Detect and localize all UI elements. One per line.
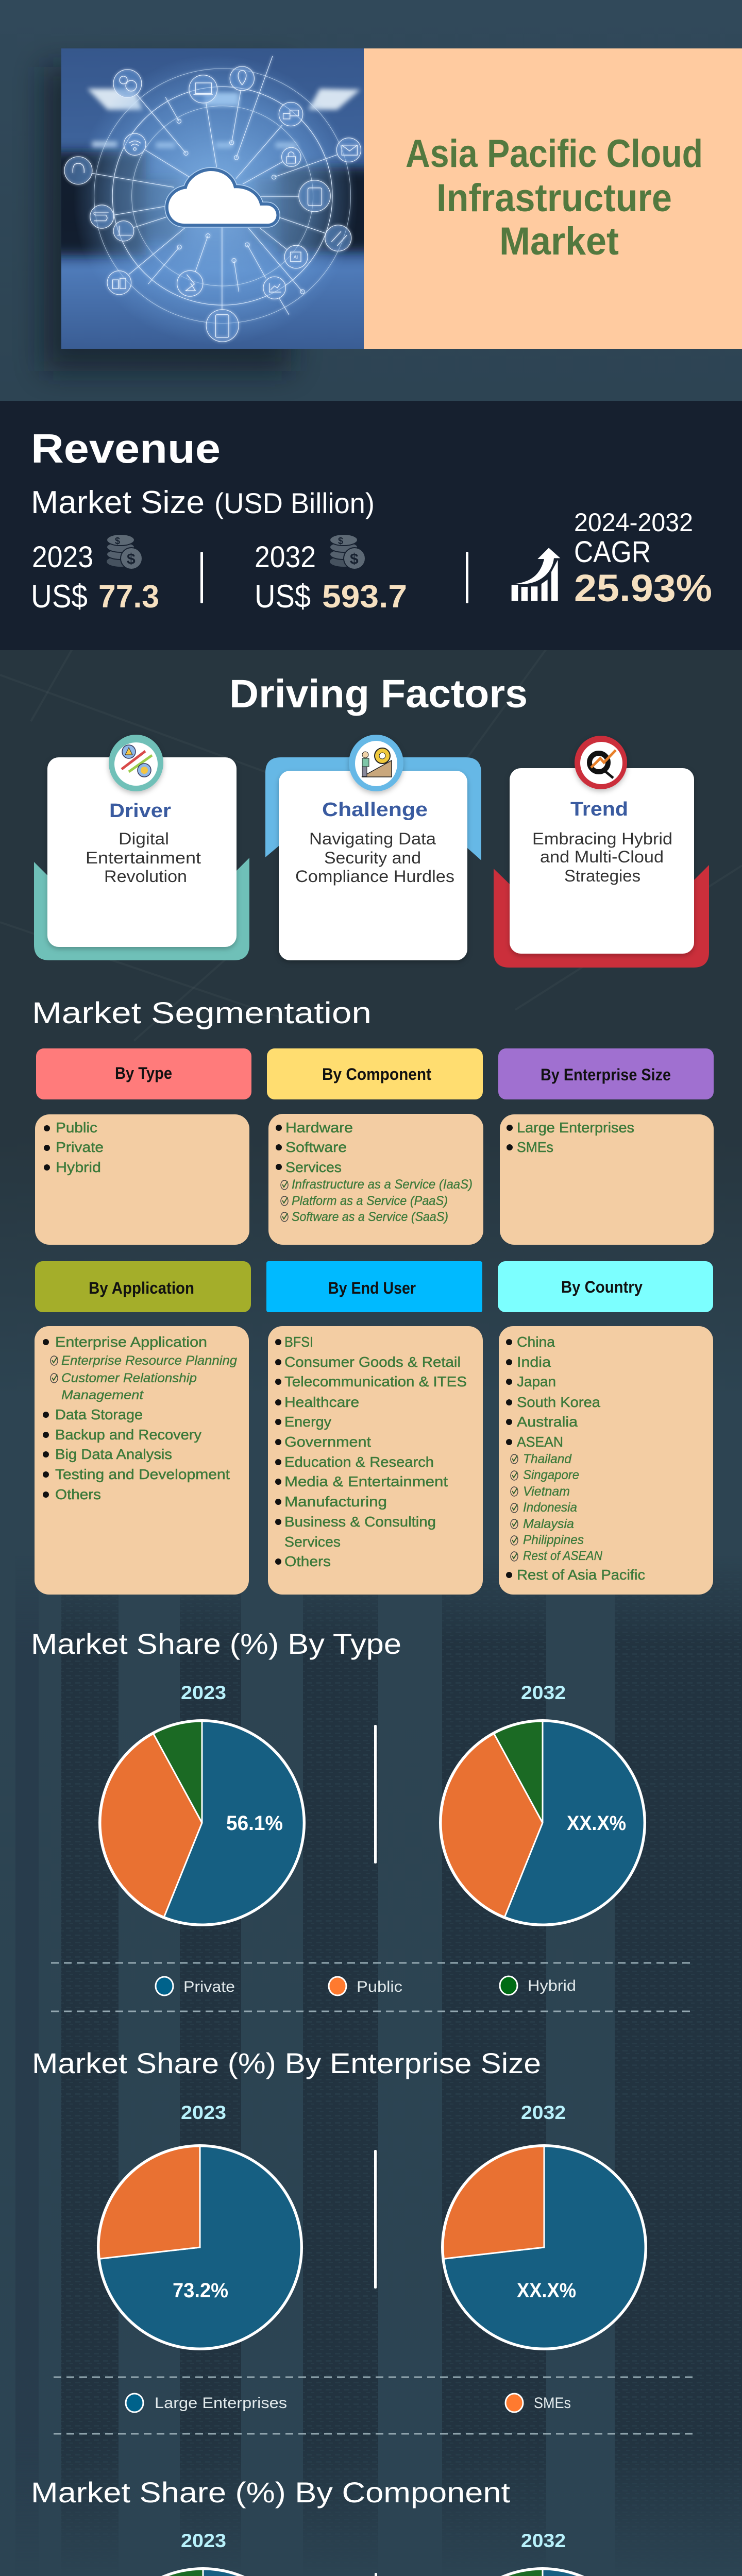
by application list: Customer Relationship: [61, 1371, 197, 1385]
by end user list: Education & Research: [284, 1454, 434, 1470]
by country list: Indonesia: [523, 1500, 577, 1515]
by end user list: Consumer Goods & Retail: [284, 1354, 461, 1370]
node icons: AI: [294, 255, 298, 260]
by type list: Public: [56, 1120, 97, 1136]
pie chart: component 2023: [99, 2567, 307, 2576]
by type list: Hybrid: [56, 1159, 101, 1175]
metric: 2032: 2032: [255, 540, 316, 574]
icon: growth chart: [512, 548, 560, 601]
section: share by enterprise size: 2032: [521, 2102, 566, 2123]
metric: 2032: 593.7: [322, 579, 407, 615]
section: share by component: 2032: [521, 2530, 566, 2551]
by country list: India: [517, 1354, 551, 1370]
segment: by application: By Application: [89, 1279, 194, 1297]
by country list: ASEAN: [517, 1434, 563, 1450]
driver text: [86, 829, 201, 886]
by end user list: Energy: [284, 1414, 331, 1430]
heading: market segmentation: Market Segmentation: [32, 996, 372, 1030]
by application list: Enterprise Resource Planning: [61, 1353, 237, 1368]
by component list: Infrastructure as a Service (IaaS): [292, 1177, 473, 1192]
by type list: Private: [56, 1139, 104, 1155]
icon: coins 2023: [107, 534, 142, 569]
legend: [156, 1976, 576, 1995]
icon: coins 2032: [330, 534, 365, 569]
challenge text: Compliance Hurdles: [295, 867, 454, 886]
pie chart: type 2023: [98, 1719, 306, 1926]
cloud: [168, 171, 276, 224]
metric: 2032: US$: [255, 579, 311, 615]
background: server rack strips: [61, 1594, 742, 2517]
legend: SMEs: [534, 2395, 571, 2412]
title: Asia Pacific Cloud: [406, 132, 703, 176]
legend: Private: [183, 1978, 235, 1995]
by country list: Philippines: [523, 1533, 584, 1547]
section: share by type: [31, 1628, 695, 2011]
by end user list: Services: [284, 1534, 341, 1550]
by country list: Vietnam: [523, 1484, 570, 1499]
connector lines: [92, 56, 337, 315]
section: share by component: 2023: [181, 2530, 226, 2551]
by country list: Australia: [517, 1414, 578, 1430]
by enterprise size list: SMEs: [517, 1139, 553, 1155]
challenge text: [295, 829, 454, 886]
pie chart: enterprise 2032: XX.X%: [517, 2279, 576, 2302]
pie chart: type 2032: [439, 1719, 646, 1926]
segment: by enterprise size: [498, 1048, 714, 1245]
by country list: Thailand: [523, 1452, 572, 1466]
by component list: [276, 1120, 473, 1224]
icon: coins 2023: $: [115, 536, 120, 546]
section: share by type: 2032: [521, 1682, 566, 1703]
heading: Market Share (%) By Type: [31, 1628, 401, 1660]
by end user list: [275, 1334, 467, 1569]
icon: trend badge: [575, 736, 627, 789]
by country list: Rest of ASEAN: [523, 1549, 603, 1563]
by end user list: Healthcare: [284, 1394, 359, 1410]
card: trend: Trend: [570, 799, 628, 820]
legend: Large Enterprises: [155, 2395, 287, 2412]
section: share by component: [31, 2476, 696, 2576]
heading: Market Share (%) By Component: [31, 2476, 510, 2509]
heading: driving factors: Driving Factors: [229, 672, 528, 716]
hero photo: cloud network: [50, 48, 376, 349]
metric: CAGR: 2024-2032: [574, 508, 693, 537]
challenge text: Navigating Data: [309, 829, 436, 848]
metric: 2023: US$: [31, 579, 88, 615]
by end user list: Manufacturing: [284, 1494, 387, 1510]
by end user list: Media & Entertainment: [284, 1473, 448, 1489]
by enterprise size list: Large Enterprises: [517, 1120, 634, 1136]
pie chart: enterprise 2023: [97, 2144, 303, 2350]
icon: coins 2032: $: [350, 551, 359, 568]
segment: by type: [35, 1048, 251, 1245]
by application list: [43, 1334, 237, 1502]
title: Market: [499, 219, 619, 263]
by type list: [44, 1120, 104, 1175]
metric: 2032: [255, 534, 407, 615]
card: trend: [494, 736, 709, 968]
card: challenge: Challenge: [322, 799, 428, 821]
by country list: Japan: [517, 1374, 556, 1389]
market size label: Market Size: [31, 485, 205, 520]
by enterprise size list: [507, 1120, 634, 1155]
revenue heading: Revenue: [31, 426, 221, 471]
by component list: Platform as a Service (PaaS): [292, 1194, 448, 1208]
by component list: Software: [285, 1139, 347, 1155]
by application list: Backup and Recovery: [55, 1427, 201, 1443]
by end user list: BFSI: [284, 1334, 313, 1350]
segment: by country: [498, 1261, 713, 1595]
revenue panel: [0, 401, 742, 650]
icon: driver badge: [109, 735, 163, 791]
card: driver: Driver: [109, 800, 171, 822]
section: share by type: 2023: [181, 1682, 226, 1703]
by component list: Services: [285, 1159, 342, 1175]
pie chart: type 2023: 56.1%: [226, 1812, 283, 1835]
by country list: Malaysia: [523, 1517, 574, 1531]
market size label: (USD Billion): [214, 487, 375, 519]
by application list: Others: [55, 1486, 101, 1502]
by country list: Rest of Asia Pacific: [517, 1567, 645, 1583]
driver text: Digital: [119, 829, 169, 848]
trend text: and Multi-Cloud: [540, 848, 664, 866]
by component list: Hardware: [285, 1120, 353, 1136]
by application list: Testing and Development: [55, 1466, 230, 1482]
card: challenge: [265, 735, 481, 960]
network rings: [94, 69, 351, 324]
by application list: Enterprise Application: [55, 1334, 207, 1350]
driver text: Revolution: [104, 867, 187, 886]
by end user list: Business & Consulting: [284, 1514, 436, 1530]
heading: Market Share (%) By Enterprise Size: [32, 2047, 541, 2079]
metric: CAGR: [574, 508, 712, 609]
trend text: Strategies: [564, 867, 640, 885]
by country list: China: [517, 1334, 555, 1350]
driver text: Entertainment: [86, 849, 201, 867]
by application list: Big Data Analysis: [55, 1446, 172, 1462]
pie chart: component 2032: [439, 2567, 646, 2576]
section: share by enterprise size: [32, 2047, 697, 2434]
icon: coins 2023: $: [127, 551, 136, 568]
by application list: Management: [61, 1388, 144, 1402]
segment: by application: [35, 1261, 251, 1595]
by country list: [506, 1334, 645, 1583]
network nodes: [64, 66, 361, 342]
icon: challenge badge: [349, 735, 403, 791]
by end user list: Telecommunication & ITES: [284, 1374, 467, 1389]
segment: by end user: By End User: [328, 1279, 416, 1297]
segment: by component: [267, 1048, 483, 1245]
by application list: Data Storage: [55, 1406, 143, 1422]
section: share by enterprise size: 2023: [181, 2102, 226, 2123]
by end user list: Others: [284, 1553, 331, 1569]
by country list: Singapore: [523, 1468, 579, 1482]
metric: 2023: [31, 534, 159, 615]
node icons: [73, 71, 357, 337]
legend: Hybrid: [528, 1977, 576, 1994]
pie chart: enterprise 2023: 73.2%: [173, 2279, 228, 2302]
metric: 2023: 77.3: [98, 579, 159, 615]
title: Infrastructure: [436, 176, 672, 220]
segment: by enterprise size: By Enterprise Size: [541, 1065, 671, 1084]
challenge text: Security and: [324, 849, 421, 867]
segment: by type: By Type: [115, 1064, 172, 1082]
legend: Public: [357, 1978, 402, 1995]
trend text: Embracing Hybrid: [532, 829, 672, 848]
by component list: Software as a Service (SaaS): [292, 1210, 448, 1224]
metric: 2023: 2023: [32, 540, 93, 574]
by end user list: Government: [284, 1434, 371, 1450]
icon: coins 2032: $: [338, 536, 343, 546]
segment: by end user: [266, 1261, 483, 1595]
segment: by country: By Country: [561, 1278, 643, 1296]
title panel: [364, 48, 742, 349]
legend: [126, 2394, 571, 2412]
metric: CAGR: CAGR: [574, 535, 651, 569]
metric: CAGR: 25.93%: [574, 567, 712, 609]
by country list: South Korea: [517, 1394, 600, 1410]
header band: [0, 0, 742, 401]
pie chart: enterprise 2032: [441, 2144, 647, 2350]
title: [406, 132, 703, 263]
segment: by component: By Component: [322, 1065, 431, 1083]
market size label: [31, 485, 375, 520]
pie chart: type 2032: XX.X%: [567, 1812, 626, 1835]
card: driver: [34, 735, 249, 960]
trend text: [532, 829, 672, 885]
